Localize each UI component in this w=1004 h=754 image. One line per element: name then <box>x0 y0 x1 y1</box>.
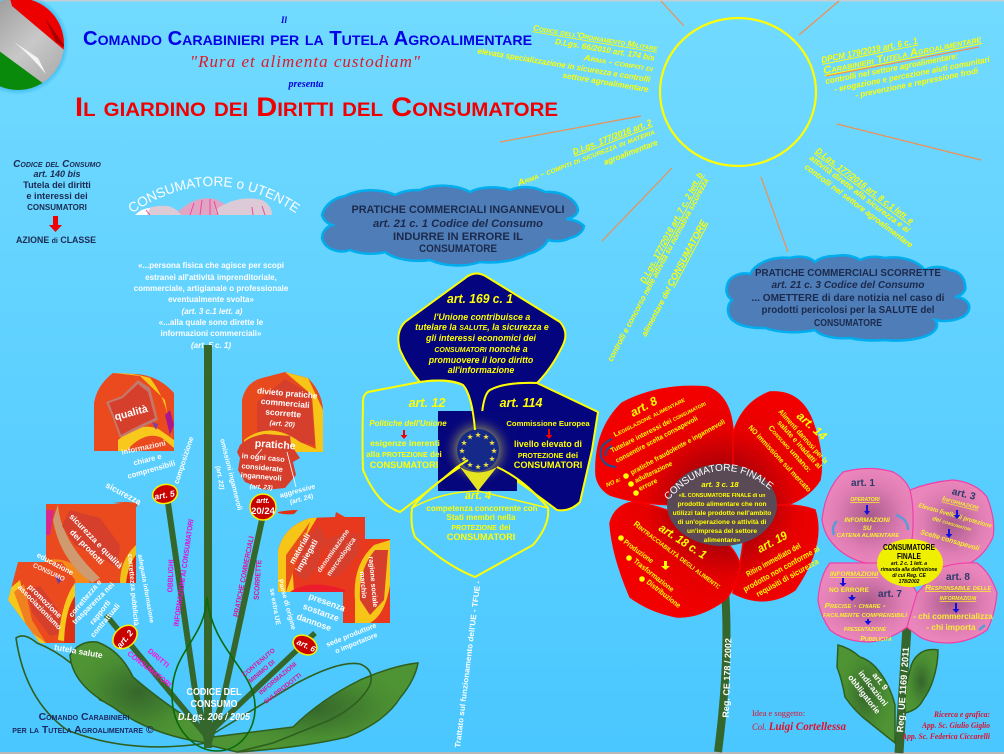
text: pink art. 8: informazioni <box>940 595 977 602</box>
labels around stems right <box>214 438 379 655</box>
definition text: consumatore: (art. 5 c. 1) <box>191 341 231 350</box>
eu flower: blue petals: ★ <box>475 431 482 439</box>
labels around stems left: rapporti <box>88 598 112 627</box>
tulip: promozione: associazionismo <box>16 583 64 632</box>
text: art. 12: alla PROTEZIONE dei <box>366 450 442 459</box>
cloud: pratiche commerciali ingannevoli: PRATICHE COMMERCIALI INGANNEVOLI <box>352 204 564 216</box>
text: art. 4: art. 4 <box>465 490 491 502</box>
red flower petals <box>596 386 821 617</box>
labels: contenuto minimo: SUI PRODOTTI <box>263 672 303 706</box>
definition text: consumatore: «...persona fisica che agisce per scopi <box>138 261 284 270</box>
text: art. 8 legislazione <box>605 394 727 496</box>
labels around stems right: aggressive <box>279 483 316 500</box>
cloud: pratiche commerciali scorrette: ... OMETTERE di dare notizia nel caso di <box>752 293 945 304</box>
eu flower: bottom petal outline <box>411 467 548 577</box>
text: art. 169 c. 1 <box>415 291 549 375</box>
text: art. 114: art. 114 <box>500 396 542 410</box>
eu flower: blue petals: ★ <box>467 461 474 469</box>
text: art. 14: art. 14 <box>794 409 830 443</box>
text: art. 8 legislazione: consentire scelta consapevoli <box>615 415 699 465</box>
labels around stems left: educazione <box>35 550 75 577</box>
red shape: pratiche: in ogni caso <box>241 451 286 464</box>
cloud: pratiche commerciali scorrette: PRATICHE COMMERCIALI SCORRETTE <box>755 268 941 279</box>
red flower center: art. 3 c. 18 <box>701 480 739 489</box>
tulip: divieto pratiche <box>242 372 323 452</box>
text: art. 169 c. 1: l'Unione contribuisce a <box>434 312 530 322</box>
label: codice del consumo <box>178 687 250 723</box>
arrow: blue <box>864 505 870 515</box>
labels: pratiche commerciali scorrette: PRATICHE COMMERCIALI <box>231 535 256 618</box>
text: art. 12: art. 12 <box>409 396 445 410</box>
tulip: sicurezza e qualità <box>46 502 137 584</box>
sun text: Codice dell'Ordinamento Militare <box>475 15 659 95</box>
labels around stems right: sostanze <box>302 601 341 623</box>
footer: comando carabinieri <box>12 711 154 736</box>
red flower center: CONSUMATORE FINALE <box>664 464 774 499</box>
sun text: DPCM Carabinieri <box>820 33 991 100</box>
arrow: down yellow <box>661 561 670 570</box>
petal: art. 1 <box>822 468 918 565</box>
sun text: D.Lgs. 177/2016 art. 2: agroalimentare <box>602 138 659 167</box>
sun text: D.Lgs. 177/2016 art. 2: Arma - compiti di sicurezza in materia <box>515 126 656 188</box>
sun text: Codice dell'Ordinamento Militare: settore agroalimentare <box>562 71 650 94</box>
credit: idea e soggetto: Col. Luigi Cortellessa <box>752 721 846 733</box>
text: pink art. 3 <box>917 486 993 553</box>
badge: art. 2: art. 2 <box>114 628 135 650</box>
left note: codice del consumo art. 140 bis: e interessi dei <box>26 191 88 201</box>
pink flower petals <box>818 468 997 643</box>
eu flower: blue petals: ★ <box>475 463 482 471</box>
text: art. 14: NO immissione sul mercato <box>747 423 813 494</box>
label: reg. ue 1169/2011: Reg. UE 1169 / 2011 <box>895 647 911 733</box>
labels: contenuto minimo: MINIMO DI <box>248 659 277 685</box>
labels: contenuto minimo: CONTENUTO <box>241 647 277 679</box>
cloud: pratiche commerciali ingannevoli: INDURRE IN ERRORE IL <box>393 231 523 243</box>
badge: artt. 20/24 <box>250 494 276 520</box>
tulip: materiali impiegati: denominazione <box>316 528 351 574</box>
text: art. 19: art. 19 <box>755 528 790 556</box>
header: organisation title: "Rura et alimenta custodiam" <box>190 52 421 71</box>
text: art. 14: salute e inadatti al <box>776 418 824 470</box>
text: art. 114: CONSUMATORI <box>514 460 582 470</box>
badge: artt. 20/24: 20/24 <box>251 506 276 517</box>
text: pink art. 1: INFORMAZIONI <box>844 517 890 524</box>
sun text: D.Lgs. 177/2016 art. 7: alimentare del CONSUMATORE <box>639 218 710 338</box>
text: art. 12: esigenze inerenti <box>370 438 440 448</box>
credit: ricerca e grafica <box>901 709 991 741</box>
text: art. 18 c. 1: Produzione <box>622 537 655 565</box>
label: trattato TFUE: Trattato sul funzionamento dell'UE - TFUE - <box>453 580 483 748</box>
badge: art. 5 <box>151 482 179 506</box>
text: art. 19: prodotto non conforme ai <box>742 544 821 594</box>
labels around stems left: comprensibili <box>126 458 176 481</box>
eu flower: blue petals: ★ <box>467 433 474 441</box>
text: pink art. 3: dei consumatori <box>931 516 973 533</box>
sun text: D.Lgs. 177/2016 art. 8: controlli nel settore agroalimentare <box>803 162 915 250</box>
arrow: down red <box>546 429 552 439</box>
left note: codice del consumo art. 140 bis: art. 140 bis <box>33 169 81 179</box>
left leaf outline <box>16 636 207 747</box>
pink flower top: consumatore o utente: CONSUMATORE o UTENTE <box>129 176 300 213</box>
text: art. 18 c. 1: art. 18 c. 1 <box>656 521 710 562</box>
text: art. 12: Politiche dell'Unione <box>369 419 447 428</box>
text: pink art. 8: - chi importa <box>926 623 976 632</box>
petal: art. 8 <box>907 563 997 643</box>
left note: codice del consumo art. 140 bis <box>13 159 101 245</box>
sun text: DPCM Carabinieri: - erogazione e percezione aiuti comunitari <box>834 55 991 94</box>
sliver <box>113 502 137 507</box>
left note: codice del consumo art. 140 bis: CONSUMATORI <box>27 203 87 212</box>
right leaf outline <box>208 663 371 752</box>
tulip: promozione: promozione <box>26 582 64 621</box>
petal: art. 8 <box>596 386 733 505</box>
tulip: sicurezza e qualità: dei prodotti <box>68 528 106 567</box>
petal: art. 7 <box>818 563 917 642</box>
text: art. 8 legislazione: Tutelare interessi dei consumatori <box>610 400 708 455</box>
sun text: Codice dell'Ordinamento Militare: D.Lgs. 66/2010 art. 174 bis <box>554 37 656 63</box>
text: art. 8 legislazione: adulterazione <box>634 460 674 485</box>
labels around stems right: sede produttore <box>325 622 378 649</box>
text: pink art. 7: facilmente comprensibili <box>823 612 908 619</box>
labels: obblighi e informazioni: OBBLIGHI <box>165 559 176 593</box>
text: pink art. 3: Informazioni <box>941 494 980 512</box>
credit: ricerca e grafica: Ricerca e grafica: <box>933 709 990 719</box>
red shape: pratiche: (art. 23) <box>249 483 273 492</box>
labels around stems left: CONSUMO <box>32 562 66 583</box>
main title: Il giardino dei Diritti del Consumatore <box>75 92 558 122</box>
text: art. 19: Ritiro immediato del <box>745 541 802 579</box>
tulip: materiali impiegati: impiegati <box>294 538 320 574</box>
sun text: DPCM Carabinieri: - prevenzione e repressione frodi <box>855 66 980 100</box>
sun text: D.Lgs. 177/2016 art. 2: D.Lgs. 177/2016 art. 2 <box>571 117 653 157</box>
definition text: consumatore: commerciale, artigianale o professionale <box>134 284 289 293</box>
arrows: blue <box>946 510 960 538</box>
labels around stems left: correttezza e <box>67 578 103 619</box>
red shape: pratiche <box>237 434 300 492</box>
labels around stems right: dannose <box>295 611 333 633</box>
text: art. 4: CONSUMATORI <box>447 532 515 542</box>
labels around stems left <box>32 435 196 660</box>
sun with rays <box>500 1 981 252</box>
red flower center: alimentare» <box>704 537 741 544</box>
left leaf <box>70 642 207 743</box>
petal: art. 19 <box>733 505 818 601</box>
text: pink art. 7: art. 7 <box>878 589 902 600</box>
labels around stems right: (art. 24) <box>289 493 314 506</box>
text: art. 114: Commissione Europea <box>506 419 590 428</box>
sun text: DPCM Carabinieri: controlli nel settore agroalimentare: <box>825 51 959 86</box>
icon: small blue arrow <box>979 625 985 630</box>
tulip: divieto pratiche: commerciali <box>260 396 310 410</box>
text: art. 4: PROTEZIONE dei <box>451 523 511 532</box>
text: art. 114 <box>500 396 590 470</box>
text: pink art. 7: Precise - chiare - <box>824 601 886 610</box>
pink flower center: di cui Reg. CE <box>892 573 926 579</box>
labels: contenuto minimo: INFORMAZIONI <box>258 661 298 697</box>
definition text: consumatore: informazioni commerciali» <box>161 329 262 338</box>
eu flower: blue petals: ★ <box>489 439 496 447</box>
sun text: D.Lgs. 177/2016 art. 8: attività dirette alla sicurezza e ai <box>808 153 912 235</box>
tulip: materiali impiegati: merceologica <box>326 537 358 578</box>
labels around stems right: (art. 22) <box>214 465 225 490</box>
badge: art. 2 <box>108 621 142 653</box>
text: pink art. 7: INFORMAZIONI <box>830 571 878 578</box>
cloud: pratiche commerciali scorrette <box>726 255 969 341</box>
text: pink art. 3: Scelte consapevoli <box>919 527 981 553</box>
text: art. 8 legislazione: errore <box>638 478 659 493</box>
text: art. 4 <box>426 490 538 542</box>
text: art. 4: Stati membri nella <box>447 513 516 522</box>
tulip: divieto pratiche: divieto pratiche <box>257 386 318 401</box>
labels around stems right: presenza <box>307 591 347 613</box>
tulip: materiali impiegati: materiali <box>288 532 312 566</box>
bullets <box>618 535 645 582</box>
credit: idea e soggetto: Idea e soggetto: <box>752 709 805 718</box>
tulip: materiali impiegati: marchio <box>358 571 367 599</box>
eu flower: blue petals: ★ <box>483 461 490 469</box>
labels around stems right: omissioni ingannevoli <box>218 438 243 511</box>
text: art. 18 c. 1: Distribuzione <box>645 577 683 610</box>
pink flower leaves <box>837 645 938 743</box>
arrows: blue <box>840 578 872 625</box>
label: art. 9: art. 9 <box>870 671 890 692</box>
text: art. 18 c. 1 <box>618 519 723 610</box>
text: pink art. 7: NO ERRORE <box>829 587 870 594</box>
petal: art. 18 <box>610 502 740 617</box>
tulip: qualità <box>94 373 174 451</box>
text: pink art. 8 <box>913 572 993 632</box>
red flower center <box>664 464 777 546</box>
label: reg. ce 178/2002: Reg. CE 178 / 2002 <box>721 638 733 718</box>
text: pink art. 3: art. 3 <box>951 486 977 503</box>
text: art. 4: competenza concorrente con <box>426 504 538 513</box>
labels around stems left: correttezza pubblicità <box>126 554 139 626</box>
labels: contenuto minimo <box>241 647 303 706</box>
text: pink art. 1 <box>833 478 908 539</box>
labels: obblighi e informazioni: INFORMAZIONI AI CONSUMATORI <box>172 519 195 627</box>
eu flower: blue petals: ★ <box>459 447 466 455</box>
petal: art. 14 <box>725 392 821 512</box>
cloud: pratiche commerciali ingannevoli: art. 21 c. 1 Codice del Consumo <box>373 218 543 230</box>
text: art. 169 c. 1: CONSUMATORI nonché a <box>434 344 528 354</box>
stems <box>106 345 315 748</box>
text: pink art. 7: Pubblicità <box>860 636 892 643</box>
red shape: pratiche: considerate <box>241 461 283 474</box>
text: art. 19: requisiti di sicurezza <box>755 557 821 599</box>
header: organisation title <box>83 15 532 90</box>
text: art. 114: livello elevato di <box>514 439 582 449</box>
cloud: pratiche commerciali scorrette: prodotti pericolosi per la SALUTE del <box>762 305 935 316</box>
text: pink art. 7: presentazione <box>844 626 887 633</box>
sun text: D.Lgs. 177/2016 art. 7: D.Lgs. 177/2016 art. 7 c. 2 lett. b <box>638 170 705 285</box>
tulip: divieto pratiche: (art. 20) <box>269 420 296 429</box>
tulip: materiali impiegati: ragione sociale <box>367 556 378 608</box>
footer: comando carabinieri: per la Tutela Agroalimentare © <box>12 724 154 736</box>
label: codice del consumo: CODICE DEL <box>186 687 242 698</box>
header: organisation title: Comando Carabinieri per la Tutela Agroalimentare <box>83 28 532 50</box>
sun text: Codice dell'Ordinamento Militare: Arma - compiti di <box>582 53 654 74</box>
text: art. 14 <box>747 407 831 494</box>
pink flower center: rimanda alla definizione <box>881 567 938 573</box>
text: art. 8 legislazione: NO a: <box>605 477 622 489</box>
pink flower center: 178/2002 <box>899 579 920 585</box>
icon: blue curved arrow <box>600 439 616 467</box>
red flower center: un'impresa del settore <box>687 528 757 535</box>
red flower stem <box>718 590 726 752</box>
arrow: down red <box>400 430 408 439</box>
pink flower center: FINALE <box>897 552 921 561</box>
cloud: pratiche commerciali scorrette: art. 21 c. 3 Codice del Consumo <box>772 279 925 291</box>
cloud: pratiche commerciali ingannevoli <box>322 186 584 265</box>
cloud: pratiche commerciali scorrette: CONSUMATORE <box>814 318 882 329</box>
text: art. 169 c. 1: all'informazione <box>448 365 514 375</box>
labels around stems right: o importatore <box>334 632 379 655</box>
label: codice del consumo: CONSUMO <box>190 699 238 710</box>
left note: codice del consumo art. 140 bis: Codice del Consumo <box>13 159 101 170</box>
sun text: D.Lgs. 177/2016 art. 8: D.Lgs. 177/2016 art. 8 c.1 lett. e <box>814 146 916 226</box>
text: pink art. 3: Elevato livello di protezione <box>917 502 993 530</box>
eu flower: blue petals: ★ <box>483 433 490 441</box>
label: art. 9: obbligatorie <box>846 673 882 716</box>
red flower center: prodotto alimentare che non <box>677 501 767 508</box>
credit: ricerca e grafica: App. Sc. Giulio Giglio <box>921 720 990 730</box>
text: pink art. 8: art. 8 <box>946 572 970 583</box>
eu flower: blue petals <box>398 273 598 510</box>
labels: obblighi e informazioni <box>165 519 195 627</box>
labels around stems left: chiare e <box>132 452 162 467</box>
text: art. 169 c. 1: art. 169 c. 1 <box>447 291 513 306</box>
text: art. 18 c. 1: Trasformazione <box>632 556 676 594</box>
labels around stems left: informazioni <box>120 438 166 457</box>
text: art. 169 c. 1: gli interessi economici dei <box>425 333 537 343</box>
cloud: pratiche commerciali ingannevoli: CONSUMATORE <box>419 243 497 255</box>
text: art. 12: CONSUMATORI <box>370 460 438 470</box>
labels around stems right: se extra UE <box>268 588 281 626</box>
sun text: Codice dell'Ordinamento Militare: elevata specializzazione in sicurezza e controlli <box>477 46 652 84</box>
text: pink art. 1: art. 1 <box>851 478 875 489</box>
definition text: consumatore: estranei all'attività imprenditoriale, <box>145 273 277 282</box>
text: art. 8 legislazione: art. 8 <box>628 394 660 420</box>
labels around stems left: trasparenza nei <box>70 580 116 626</box>
label: codice del consumo: D.Lgs. 206 / 2005 <box>178 712 250 723</box>
eu flower: left petal outline <box>362 381 475 512</box>
text: pink art. 8: - chi commercializza <box>913 612 993 621</box>
header: organisation title: presenta <box>288 79 324 90</box>
text: art. 8 legislazione: Legislazione alimentare <box>613 396 687 439</box>
arrow: blue <box>952 603 960 613</box>
left note: codice del consumo art. 140 bis: AZIONE di CLASSE <box>16 235 96 245</box>
tulip: materiali impiegati <box>276 510 392 625</box>
right leaf <box>208 663 418 752</box>
credit: idea e soggetto <box>752 709 846 733</box>
bullets <box>623 473 639 496</box>
definition text: consumatore: eventualmente svolta» <box>168 295 254 304</box>
labels around stems left: contrattuali <box>88 602 122 639</box>
footer: comando carabinieri: Comando Carabinieri <box>39 711 129 723</box>
labels: pratiche commerciali scorrette: SCORRETTE <box>252 559 263 600</box>
pink flower center <box>877 539 943 587</box>
definition text: consumatore: «...alla quale sono dirette le <box>159 318 264 327</box>
tulip: qualità: qualità <box>113 403 149 423</box>
labels around stems left: sicurezza <box>104 480 143 507</box>
tulip: sicurezza e qualità: sicurezza e qualità <box>67 512 124 571</box>
text: art. 14: Alimenti dannosi per la <box>777 407 831 466</box>
red flower center: utilizzi tale prodotto nell'ambito <box>673 510 771 517</box>
pink flower center: CONSUMATORE <box>883 543 935 552</box>
eu flower: blue petals: ★ <box>489 455 496 463</box>
header: organisation title: Il <box>280 15 288 25</box>
teardrop outline <box>172 597 255 751</box>
eu flower: blue petals: ★ <box>461 439 468 447</box>
definition text: consumatore <box>134 261 289 350</box>
sun text: D.Lgs. 177/2016 art. 7: controlli e concorso nelle attività su normativa sicurezza <box>606 176 711 363</box>
label: art. 9: indicazioni <box>856 669 890 708</box>
labels around stems left: adeguata informazione <box>136 554 155 624</box>
left note: codice del consumo art. 140 bis: Tutela dei diritti <box>23 180 91 190</box>
credit: ricerca e grafica: App. Sc. Federica Ciccarelli <box>901 731 991 741</box>
text: art. 169 c. 1: tutelare la SALUTE, la sicurezza e <box>415 322 549 332</box>
text: art. 18 c. 1: Rintracciabilità degli alimenti: <box>632 519 723 591</box>
sun text: Codice dell'Ordinamento Militare: Codice dell'Ordinamento Militare <box>532 23 659 53</box>
text: pink art. 1: SU <box>863 525 872 532</box>
text: art. 169 c. 1: promuovere il loro diritto <box>428 355 534 365</box>
definition text: consumatore: (art. 3 c.1 lett. a) <box>182 307 243 316</box>
labels around stems left: composizione <box>172 435 196 485</box>
eu emblem square <box>438 411 517 491</box>
text: pink art. 1: CATENA ALIMENTARE <box>837 533 900 539</box>
badge: artt. 20/24: artt. <box>256 498 270 505</box>
tulip: promozione <box>8 560 78 645</box>
text: art. 114: PROTEZIONE dei <box>518 450 578 460</box>
icon: blue arcs <box>833 515 908 535</box>
badge: art. 6: art. 6 <box>295 638 317 654</box>
eu flower: blue petals: ★ <box>491 447 498 455</box>
pink flower center: art. 2 c. 1 lett. a <box>891 561 927 567</box>
text: pink art. 1: operatori <box>850 494 880 503</box>
text: pink art. 7 <box>823 571 908 643</box>
badge: art. 6 <box>290 631 320 659</box>
text: art. 12 <box>366 396 447 470</box>
eu flower: blue petals: ★ <box>461 455 468 463</box>
labels around stems left: tutela salute <box>54 642 104 660</box>
sun text: DPCM Carabinieri: DPCM 179/2019 art. 6 c. 1 <box>820 36 918 65</box>
labels around stems right: Paese di origine <box>276 579 297 631</box>
arrow: to azione di classe <box>49 216 62 232</box>
tulip: divieto pratiche: scorrette <box>265 406 302 420</box>
labels: diritti consumatori: DIRITTI <box>146 647 171 670</box>
red shape: pratiche: pratiche <box>254 438 296 452</box>
red flower center: «IL CONSUMATORE FINALE di un <box>679 493 765 499</box>
red shape: pratiche: ingannevoli <box>240 470 282 483</box>
text: art. 8 legislazione: pratiche fraudolente e ingannevoli <box>630 419 727 477</box>
text: art. 14: Consumo umano: <box>767 423 813 474</box>
red flower center: di un'operazione o attività di <box>678 519 767 526</box>
icon: italian flag circle <box>0 0 70 95</box>
petal: art. 3 <box>910 480 994 568</box>
pink flower stem <box>899 627 907 753</box>
sliver <box>278 510 298 514</box>
text: pink art. 8: Responsabile delle <box>925 583 992 592</box>
labels: diritti consumatori: CONSUMATORI <box>126 649 173 689</box>
sun text: DPCM Carabinieri: Carabinieri Tutela Agroalimentare <box>822 33 983 77</box>
badge: art. 5: art. 5 <box>153 488 176 502</box>
